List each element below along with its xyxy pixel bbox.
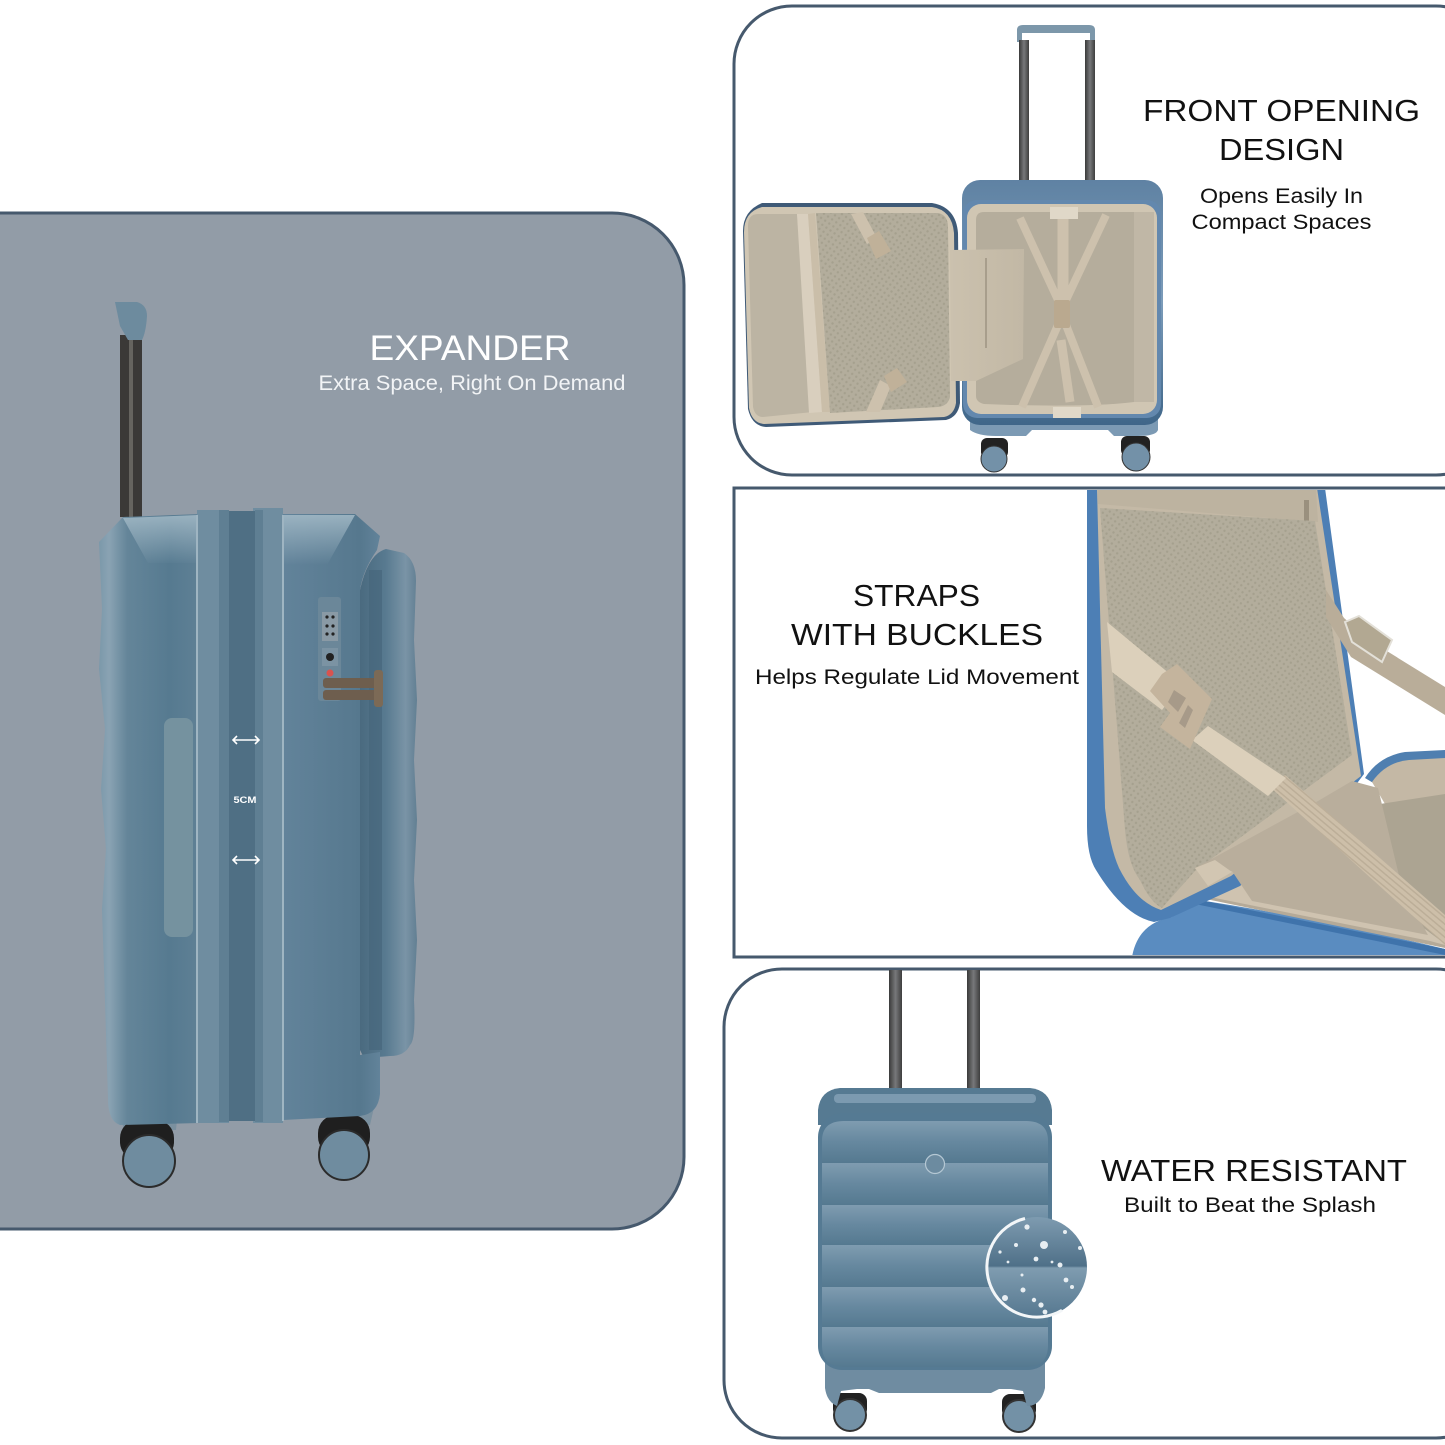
lid strap and buckle bottom [866, 368, 907, 412]
heading: water resistant: WATER RESISTANT [1101, 1153, 1407, 1188]
suitcase shell [99, 514, 200, 1125]
panel: water resistant [724, 969, 1445, 1438]
main strap ribbed [1270, 775, 1445, 945]
lower shell [1132, 899, 1445, 957]
zip strip [1098, 490, 1318, 522]
text: compact spaces: Compact Spaces [1192, 211, 1372, 234]
lid [743, 203, 960, 427]
icon: water droplets callout [987, 1217, 1087, 1317]
text: built to beat: Built to Beat the Splash [1124, 1194, 1376, 1217]
trolley handle [889, 970, 980, 1088]
trolley handle [115, 302, 147, 517]
wheels [981, 436, 1150, 472]
icon: arrow bottom [233, 856, 259, 864]
panel: straps with buckles [734, 488, 1445, 957]
panel: expander [0, 213, 684, 1229]
right rim [1365, 750, 1445, 784]
shell [962, 180, 1163, 425]
lining [967, 204, 1157, 414]
wheels [114, 1090, 378, 1187]
floor lining [1210, 898, 1445, 948]
icon: arrow top [233, 736, 259, 744]
heading: design: DESIGN [1219, 132, 1344, 167]
wheels [833, 1393, 1036, 1432]
suitcase interior close-up [1087, 488, 1445, 957]
lid strap and buckle top [851, 212, 891, 259]
suitcase front view [818, 970, 1087, 1432]
main strap light [1107, 622, 1286, 796]
text: expander subtitle: Extra Space, Right On Demand [318, 372, 626, 395]
suitcase side view [99, 302, 417, 1187]
heading: front opening: FRONT OPENING [1143, 93, 1420, 128]
mesh [1100, 508, 1352, 908]
text: opens easily: Opens Easily In [1200, 185, 1363, 208]
text: helps regulate: Helps Regulate Lid Movement [755, 666, 1079, 689]
cross straps [1020, 215, 1106, 407]
suitcase open [743, 25, 1163, 472]
center expander band [196, 508, 284, 1123]
buckle [1054, 300, 1070, 328]
logo badge [926, 1154, 944, 1174]
base [825, 1360, 1045, 1406]
main buckle [1150, 664, 1212, 749]
trolley handle [1017, 25, 1095, 182]
top shell [818, 1088, 1052, 1125]
heading: straps: STRAPS [853, 578, 980, 613]
combination lock [318, 597, 383, 707]
right strap [1326, 590, 1445, 715]
front pocket [360, 549, 417, 1058]
lid lining [1097, 488, 1361, 910]
panel: front opening design [734, 6, 1445, 475]
heading: with buckles: WITH BUCKLES [791, 617, 1043, 652]
lid shell [1087, 488, 1364, 922]
front shell [818, 1113, 1052, 1370]
flap [950, 249, 1024, 381]
label: 5cm: 5CM [234, 795, 256, 805]
heading: expander: EXPANDER [370, 329, 570, 368]
side carry handle [164, 718, 193, 937]
front pocket ribs [822, 1121, 1048, 1367]
base [970, 410, 1158, 436]
flap fabric [1195, 781, 1428, 935]
